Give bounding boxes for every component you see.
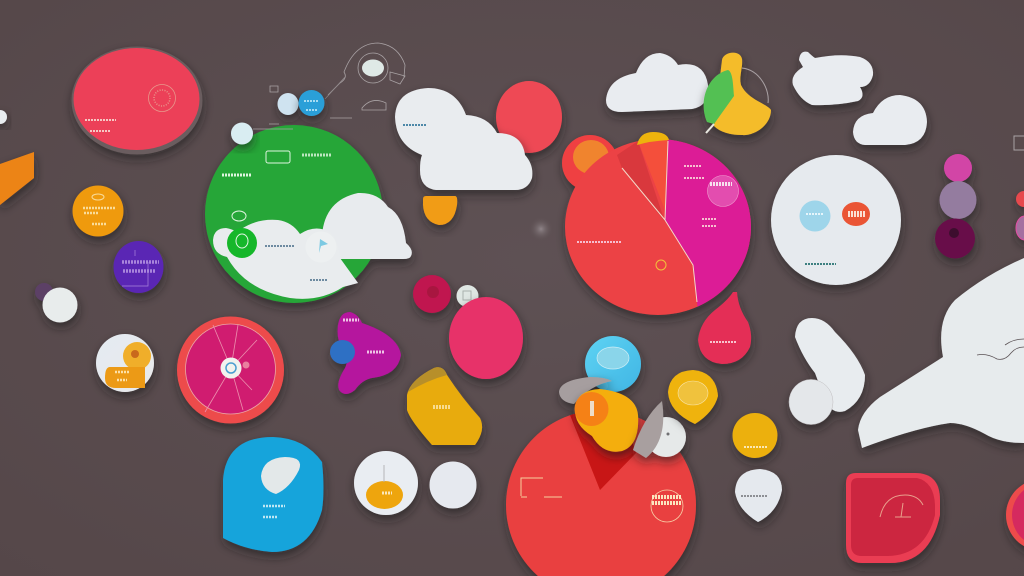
magenta inner circle bbox=[708, 176, 738, 206]
yellow cap bbox=[637, 132, 669, 145]
magenta slice bbox=[666, 140, 751, 307]
badge: purple circle bbox=[114, 241, 164, 293]
purple blob bbox=[330, 312, 401, 394]
blue circle bbox=[298, 90, 324, 116]
yellow drop bbox=[668, 370, 718, 424]
red circle behind cloud bbox=[496, 81, 562, 153]
green small badge bbox=[227, 228, 257, 258]
yellow circle bbox=[732, 413, 778, 458]
big white cloud bbox=[395, 88, 532, 190]
orange small drop bbox=[423, 196, 457, 225]
orange circle bbox=[574, 392, 608, 426]
left edge white dot bbox=[0, 110, 7, 124]
yellow and green icon bbox=[704, 53, 771, 135]
yellow shape bbox=[407, 367, 482, 445]
panel: pink wheel disc bbox=[177, 316, 284, 424]
lighter red slice bbox=[638, 137, 668, 210]
light blue badge bbox=[800, 200, 830, 232]
pale circle bbox=[278, 93, 298, 115]
line art connector bbox=[253, 43, 405, 129]
dark red slice bbox=[617, 141, 665, 222]
white pill shape bbox=[789, 318, 865, 424]
green disc bbox=[205, 125, 383, 303]
blue circle behind yellow blob bbox=[585, 336, 641, 392]
green disc labels bbox=[222, 151, 331, 221]
badge: orange circle bbox=[72, 186, 124, 236]
cloud top centre bbox=[606, 53, 708, 112]
pink circle stack bbox=[935, 154, 976, 258]
drop small red bbox=[698, 292, 751, 364]
white cloud lower with pointer bbox=[213, 220, 358, 299]
red bump bbox=[562, 135, 618, 191]
badge: white with orange shapes bbox=[96, 334, 154, 392]
orange wedge bbox=[0, 152, 34, 205]
pale ball on green disc bbox=[231, 122, 253, 144]
highlight glow bbox=[529, 217, 553, 241]
white teardrop bbox=[735, 469, 782, 522]
red main area bbox=[560, 135, 760, 320]
big white bird shape bbox=[858, 258, 1024, 448]
right edge outline icon bbox=[1014, 136, 1024, 150]
panel: white disc bbox=[771, 155, 901, 285]
pink disc bbox=[449, 297, 523, 379]
pale round button bbox=[306, 232, 336, 262]
panel: green circle with clouds bbox=[205, 125, 412, 303]
red square panel bbox=[846, 473, 940, 563]
red bump inner bbox=[573, 140, 609, 174]
white ball with purple back bbox=[35, 283, 78, 322]
red pie labels bbox=[521, 478, 562, 497]
white circle with orange bbox=[354, 451, 418, 515]
grey petal bbox=[559, 377, 612, 404]
pie divider lines bbox=[622, 141, 697, 302]
small white pebble bbox=[456, 285, 478, 307]
pie chart magenta and red bbox=[560, 132, 760, 320]
pale ellipse in line art bbox=[362, 60, 384, 76]
red badge bbox=[842, 202, 870, 226]
blue shape bbox=[223, 437, 324, 552]
pie labels bbox=[577, 166, 716, 242]
pie body bbox=[560, 135, 760, 320]
magenta small circle bbox=[413, 275, 451, 313]
white ball with grey cone bbox=[633, 401, 686, 458]
small cloud right bbox=[853, 95, 927, 145]
panel: red disc bbox=[72, 46, 202, 154]
cloud top right bbox=[792, 52, 873, 105]
dark red slice bbox=[570, 414, 636, 490]
right edge badges bbox=[1016, 191, 1024, 240]
big red pie bbox=[506, 405, 696, 576]
white cloud right bbox=[322, 193, 412, 259]
yellow blob bbox=[574, 389, 638, 452]
white circle plain bbox=[430, 462, 476, 508]
right edge wheel disc bbox=[1006, 479, 1024, 551]
